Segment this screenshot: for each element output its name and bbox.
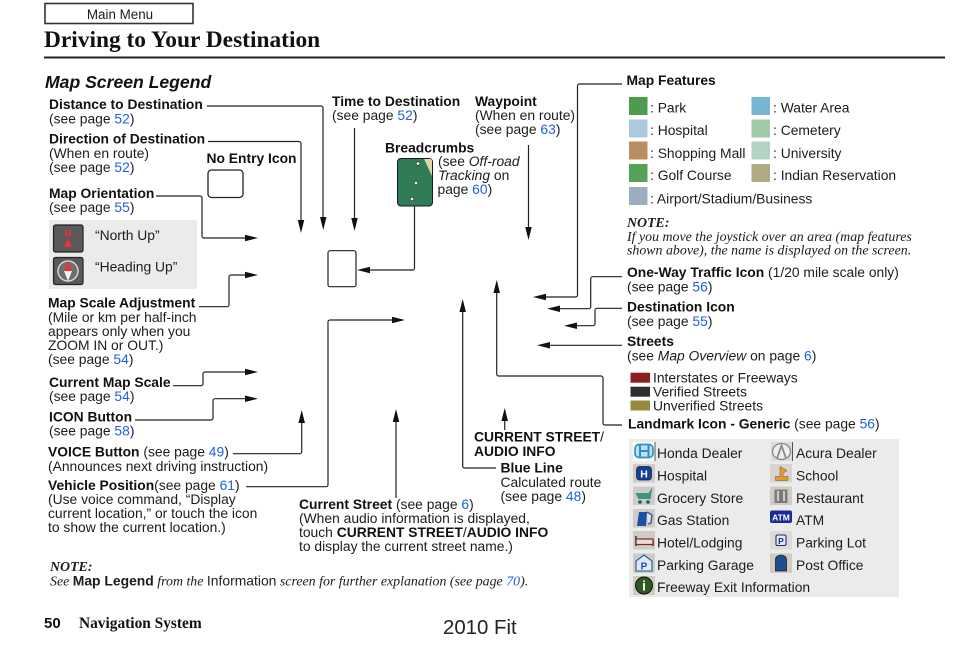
label: icon button: ICON Button	[49, 409, 132, 425]
arrow: direction of destination	[208, 142, 304, 233]
label: direction of destination	[49, 130, 205, 175]
icon: parking lot	[770, 531, 866, 550]
arrow: distance to destination	[207, 106, 326, 230]
arrow: voice button	[233, 410, 305, 454]
label: time to destination	[332, 93, 460, 123]
swatch: water area: : Water Area	[773, 100, 850, 116]
swatch: golf course: : Golf Course	[650, 167, 732, 183]
note: joystick: shown above), the name is displayed on the screen.	[627, 244, 911, 258]
label: current street	[299, 496, 548, 554]
label: distance to destination: Distance to Destination	[49, 96, 203, 112]
note: joystick: If you move the joystick over an area (map features	[626, 230, 912, 245]
icon: one-way frame	[328, 251, 356, 287]
title: Driving to Your Destination	[44, 27, 320, 53]
heading: map screen legend: Map Screen Legend	[45, 72, 212, 92]
label: vehicle position: (Use voice command, “Display	[48, 491, 236, 507]
note: map legend	[49, 560, 528, 590]
arrow: waypoint	[525, 145, 532, 240]
label: blue line	[500, 460, 602, 504]
arrow: destination icon	[564, 308, 622, 329]
icon: hospital: Hospital	[657, 468, 707, 484]
icon: no entry frame	[208, 170, 243, 198]
arrow: icon button	[135, 395, 258, 420]
footer: model year: 2010 Fit	[443, 617, 517, 639]
icon: parking lot: Parking Lot	[796, 534, 866, 550]
label: map orientation: Map Orientation	[49, 185, 154, 201]
icon: parking lot: P	[778, 536, 784, 546]
panel: orientation modes: “Heading Up”	[95, 258, 178, 274]
label: map scale adjustment	[48, 294, 196, 367]
swatch: hospital	[629, 120, 708, 138]
swatch: water area	[752, 97, 850, 116]
label: current street: touch CURRENT STREET/AUDIO INFO	[299, 524, 548, 540]
arrow: map scale adjustment	[199, 272, 258, 307]
swatch: park: : Park	[650, 100, 686, 116]
icon: north up	[54, 225, 83, 252]
label: breadcrumbs: Breadcrumbs	[385, 140, 475, 156]
legend: street colors: Verified Streets	[653, 384, 747, 400]
icon: honda dealer	[633, 442, 743, 461]
label: current street/audio info: CURRENT STREET/	[474, 429, 604, 445]
icon: grocery store	[633, 486, 743, 506]
icon: breadcrumbs map	[398, 158, 432, 206]
icon: post office	[770, 554, 864, 573]
note: joystick	[626, 216, 912, 258]
legend: map feature swatches	[629, 97, 896, 206]
footer: page number and section: Navigation System	[79, 615, 202, 632]
icon: atm: ATM	[772, 512, 790, 522]
arrow: blue line	[459, 299, 496, 468]
icon: post office: Post Office	[796, 557, 864, 573]
panel: landmark icons	[629, 439, 899, 597]
icon: gas station: Gas Station	[657, 512, 729, 528]
label: current street/audio info	[474, 429, 604, 459]
note: map legend: See Map Legend from the Information screen for further explanation (see page 70).	[50, 573, 528, 590]
icon: freeway exit information: Freeway Exit Information	[657, 579, 810, 595]
footer: page number and section: 50	[44, 615, 61, 632]
icon: restaurant	[770, 486, 864, 506]
label: current map scale	[49, 374, 171, 404]
note: map legend: NOTE:	[49, 560, 92, 575]
label: voice button	[48, 444, 268, 474]
label: time to destination: Time to Destination	[332, 93, 460, 109]
label: waypoint	[475, 93, 575, 137]
panel: orientation modes	[49, 220, 197, 289]
label: map scale adjustment: ZOOM IN or OUT.)	[48, 337, 163, 353]
icon: north up: N	[64, 229, 72, 240]
label: destination icon: Destination Icon	[627, 299, 735, 315]
label: current street/audio info: AUDIO INFO	[474, 443, 556, 459]
arrow: current street/audio info	[501, 408, 508, 430]
label: breadcrumbs: Tracking on	[438, 167, 509, 183]
arrow: streets	[537, 342, 622, 349]
swatch: university: : University	[773, 145, 842, 161]
swatch: hospital: : Hospital	[650, 122, 708, 138]
main menu button	[45, 4, 193, 24]
icon: freeway exit information: i	[642, 578, 646, 594]
label: current street: (When audio information is displayed,	[299, 510, 530, 526]
label: vehicle position: to show the current location.)	[48, 519, 226, 535]
label: one-way traffic icon: One-Way Traffic Icon (1/20 mile scale only)	[627, 264, 899, 280]
label: current map scale: (see page 54)	[49, 388, 134, 404]
icon: parking garage	[633, 554, 754, 573]
arrow: map orientation	[156, 196, 258, 241]
label: waypoint: Waypoint	[475, 93, 537, 109]
label: map scale adjustment: (Mile or km per half-inch	[48, 309, 196, 325]
label: current street: to display the current street name.)	[299, 538, 513, 554]
legend: street colors	[630, 370, 798, 414]
icon: honda dealer: Honda Dealer	[657, 445, 743, 461]
label: voice button: (Announces next driving instruction)	[48, 458, 268, 474]
label: current street: Current Street (see page 6)	[299, 496, 474, 512]
label: voice button: VOICE Button (see page 49)	[48, 444, 229, 460]
label: direction of destination: Direction of Destination	[49, 130, 205, 146]
icon: atm: ATM	[796, 512, 824, 528]
arrow: one-way traffic icon	[547, 277, 622, 312]
arrow: vehicle position	[246, 317, 405, 487]
arrow: current street	[393, 409, 399, 498]
label: waypoint: (When en route)	[475, 107, 575, 123]
arrow: current map scale	[173, 369, 258, 386]
arrow: breadcrumbs	[357, 206, 414, 273]
icon: hotel: Hotel/Lodging	[657, 534, 742, 550]
label: icon button	[49, 409, 134, 439]
swatch: cemetery: : Cemetery	[773, 122, 841, 138]
label: breadcrumbs: (see Off-road	[438, 153, 521, 169]
icon: heading up	[54, 258, 83, 284]
icon: hospital	[633, 464, 707, 484]
label: vehicle position: current location,” or touch the icon	[48, 505, 257, 521]
label: vehicle position	[48, 477, 257, 535]
label: streets: Streets	[627, 333, 674, 349]
label: destination icon	[627, 299, 735, 329]
icon: parking garage: P	[641, 562, 648, 572]
label: direction of destination: (When en route)	[49, 145, 149, 161]
main menu button: Main Menu	[87, 7, 153, 22]
label: icon button: (see page 58)	[49, 423, 134, 439]
swatch: university	[752, 142, 842, 161]
label: map scale adjustment: (see page 54)	[48, 351, 133, 367]
icon: parking garage: Parking Garage	[657, 557, 754, 573]
swatch: indian reservation: : Indian Reservation	[773, 167, 896, 183]
label: blue line: Blue Line	[500, 460, 563, 476]
label: one-way traffic icon	[627, 264, 899, 294]
label: blue line: (see page 48)	[500, 488, 586, 504]
icon: school: School	[796, 468, 838, 484]
label: map features: Map Features	[626, 72, 716, 88]
label: streets: (see Map Overview on page 6)	[627, 348, 816, 364]
label: destination icon: (see page 55)	[627, 313, 712, 329]
icon: acura dealer: Acura Dealer	[796, 445, 877, 461]
arrow: landmark icon	[493, 280, 622, 425]
swatch: shopping mall: : Shopping Mall	[650, 145, 745, 161]
icon: hospital: H	[640, 468, 648, 480]
label: streets	[627, 333, 816, 364]
swatch: cemetery	[752, 120, 841, 138]
icon: atm	[770, 510, 824, 528]
arrow: time to destination	[351, 128, 358, 231]
legend: street colors: Unverified Streets	[653, 398, 763, 414]
label: current map scale: Current Map Scale	[49, 374, 171, 390]
arrow: map features	[533, 84, 622, 300]
icon: school	[770, 464, 838, 484]
label: breadcrumbs: page 60)	[438, 181, 492, 197]
legend: street colors: Interstates or Freeways	[653, 370, 798, 386]
label: map scale adjustment: appears only when you	[48, 323, 190, 339]
label: no entry icon: No Entry Icon	[206, 150, 296, 166]
icon: grocery store: Grocery Store	[657, 490, 743, 506]
label: time to destination: (see page 52)	[332, 107, 417, 123]
label: direction of destination: (see page 52)	[49, 159, 134, 175]
label: breadcrumbs	[385, 140, 521, 197]
icon: hotel	[633, 531, 742, 550]
label: waypoint: (see page 63)	[475, 121, 560, 137]
label: one-way traffic icon: (see page 56)	[627, 278, 712, 294]
label: map scale adjustment: Map Scale Adjustment	[48, 294, 196, 310]
icon: acura dealer	[771, 442, 877, 461]
swatch: shopping mall	[629, 142, 745, 161]
label: blue line: Calculated route	[500, 474, 602, 490]
panel: orientation modes: “North Up”	[95, 227, 160, 243]
label: map orientation	[49, 185, 154, 215]
label: vehicle position: Vehicle Position(see page 61)	[48, 477, 240, 493]
label: landmark icon: Landmark Icon - Generic (see page 56)	[628, 416, 880, 432]
swatch: park	[629, 97, 686, 116]
swatch: golf course	[629, 164, 732, 183]
icon: restaurant: Restaurant	[796, 490, 864, 506]
label: distance to destination: (see page 52)	[49, 110, 134, 126]
icon: gas station	[633, 509, 729, 528]
swatch: airport: : Airport/Stadium/Business	[650, 190, 812, 206]
note: joystick: NOTE:	[626, 216, 669, 231]
label: map orientation: (see page 55)	[49, 199, 134, 215]
label: distance to destination	[49, 96, 203, 126]
